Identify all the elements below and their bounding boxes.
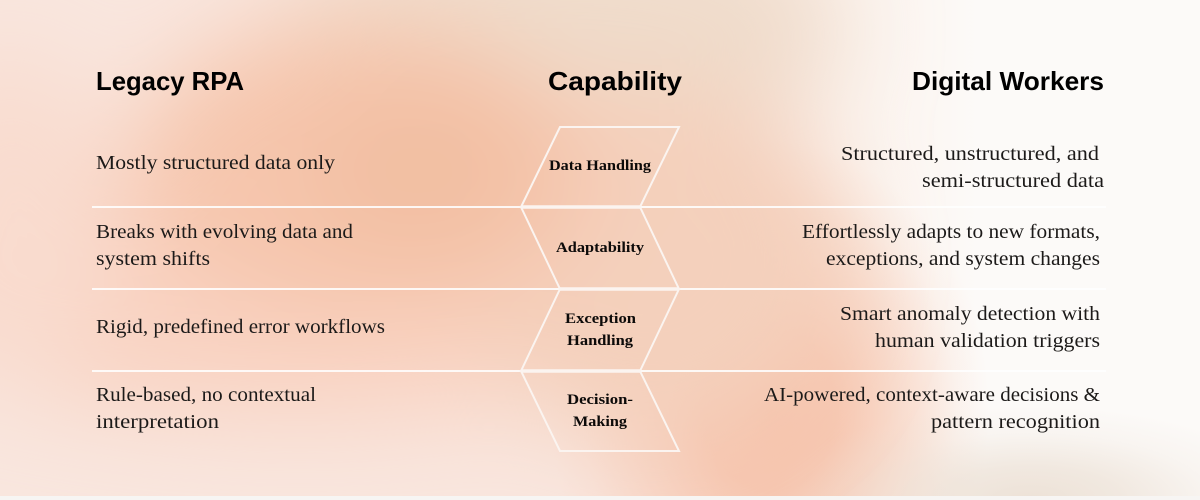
heading: Capability: Capability (548, 66, 683, 96)
capability label: Decision-Making (567, 392, 633, 430)
legacy text: decision making (96, 384, 316, 433)
digital workers text: exception handling: Smart anomaly detection with (840, 303, 1100, 325)
capability label: Decision-Making: Making (573, 414, 628, 430)
digital workers text: decision making: pattern recognition (931, 411, 1100, 433)
legacy text: exception handling: Rigid, predefined error workflows (96, 316, 385, 338)
digital workers text: decision making (764, 384, 1100, 433)
capability label: Exception Handling: Handling (567, 333, 634, 349)
digital workers text: exception handling (840, 303, 1100, 352)
capability label: Decision-Making: Decision- (567, 392, 633, 408)
legacy text: decision making: Rule-based, no contextual (96, 384, 316, 406)
heading: Legacy RPA: Legacy RPA (96, 66, 244, 96)
heading: Digital Workers: Digital Workers (912, 66, 1104, 96)
capability label: Data Handling: Data Handling (549, 158, 652, 174)
digital workers text: adaptability (802, 221, 1100, 270)
digital workers text: adaptability: Effortlessly adapts to new formats, (802, 221, 1100, 243)
legacy text: decision making: interpretation (96, 411, 219, 433)
legacy text: adaptability: system shifts (96, 248, 210, 270)
digital workers text: data handling: Structured, unstructured, and (841, 143, 1099, 165)
capability label: Adaptability: Adaptability (556, 240, 645, 256)
legacy text: adaptability: Breaks with evolving data and (96, 221, 353, 243)
digital workers text: data handling (841, 143, 1104, 192)
capability label: Exception Handling (565, 311, 637, 349)
row divider lines (92, 207, 1106, 371)
digital workers text: exception handling: human validation triggers (875, 330, 1100, 352)
legacy text: data handling: Mostly structured data only (96, 152, 335, 174)
chevron outlines (521, 127, 679, 451)
capability label: Exception Handling: Exception (565, 311, 637, 327)
digital workers text: adaptability: exceptions, and system changes (826, 248, 1100, 270)
digital workers text: data handling: semi-structured data (922, 170, 1104, 192)
digital workers text: decision making: AI-powered, context-aware decisions & (764, 384, 1100, 406)
legacy text: adaptability (96, 221, 353, 270)
